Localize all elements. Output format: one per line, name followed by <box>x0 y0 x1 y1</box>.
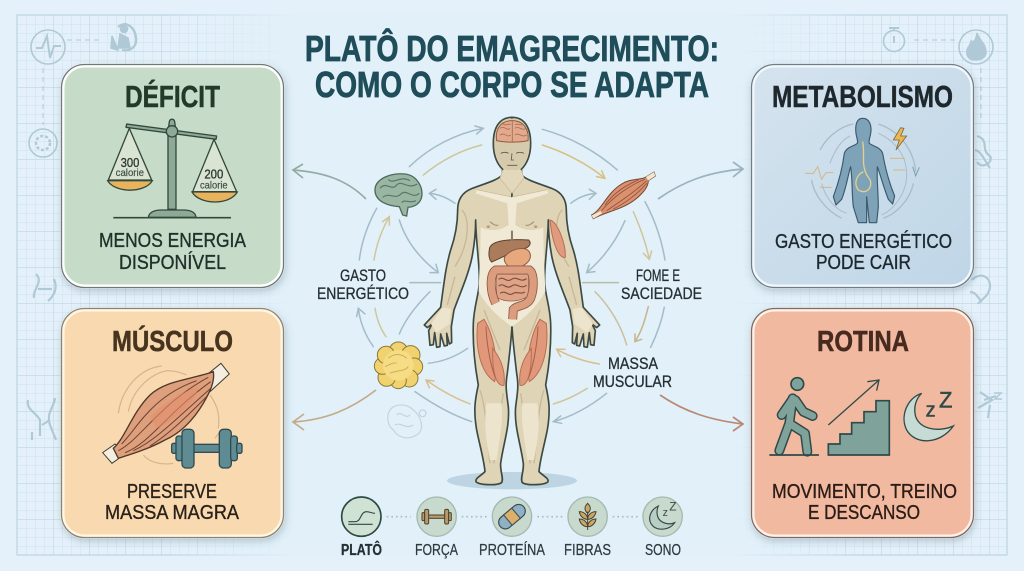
label: fome e saciedade: FOME E <box>636 267 680 285</box>
icon: sleeper sketch <box>978 392 1002 418</box>
heading: DÉFICIT <box>125 79 220 114</box>
liver <box>489 240 530 262</box>
text: movimento, treino e descanso: MOVIMENTO, TREINO <box>772 481 957 503</box>
icon: moon with zzz: Z <box>939 387 952 412</box>
icon: anatomy sketch <box>28 398 56 440</box>
label: fibras: FIBRAS <box>564 542 611 559</box>
icon: brain in head <box>496 121 528 142</box>
arrow: to metabolismo <box>658 162 743 199</box>
icon: walking person <box>770 378 818 455</box>
label: massa muscular <box>593 355 672 391</box>
icon: muscle and dumbbell <box>103 363 242 468</box>
icon: stairs with arrow <box>828 380 889 455</box>
bottom icon row <box>341 497 682 559</box>
label: 300 calorie: 300 <box>121 156 139 170</box>
panel: metabolismo <box>752 64 974 288</box>
panel: músculo <box>62 308 284 538</box>
label: força: FORÇA <box>415 542 458 559</box>
text: menos energia disponível <box>99 230 247 274</box>
organs <box>489 231 533 319</box>
bicep highlight <box>550 220 565 257</box>
label: gasto energético: ENERGÉTICO <box>317 284 409 303</box>
icon: força <box>417 497 456 536</box>
icon: balance scale <box>108 119 237 218</box>
icon: abdomen sketch <box>34 274 56 301</box>
icon: meditation figure <box>111 24 136 50</box>
label: proteína: PROTEÍNA <box>479 540 545 559</box>
icon: muscle <box>592 172 655 219</box>
label: platô: PLATÔ <box>341 540 382 559</box>
face <box>501 152 524 165</box>
icon: intestine sketch <box>975 136 991 168</box>
icon: pulse circle <box>31 30 65 64</box>
title: COMO O CORPO SE ADAPTA <box>315 64 709 105</box>
icon: proteína <box>492 497 532 536</box>
text: preserve massa magra: PRESERVE <box>127 481 217 503</box>
icon: body with energy rings <box>805 118 919 223</box>
panel: déficit <box>62 64 284 288</box>
label: 300 calorie: calorie <box>116 168 144 179</box>
icon: flame circle <box>959 30 993 64</box>
stomach <box>504 248 530 268</box>
small intestine <box>497 273 529 301</box>
icon: walker, stairs, moon <box>770 378 953 455</box>
text: preserve massa magra: MASSA MAGRA <box>105 502 240 524</box>
heading: ROTINA <box>817 326 909 358</box>
arrow: to rotina <box>660 395 743 431</box>
icon: stopwatch <box>884 28 904 52</box>
icon: faint brain <box>388 405 426 438</box>
head shading <box>495 119 529 172</box>
text: movimento, treino e descanso: E DESCANSO <box>808 502 920 524</box>
corner decorative icons <box>28 24 1002 440</box>
icon: platô <box>342 497 381 536</box>
label: fome e saciedade: SACIEDADE <box>621 285 702 303</box>
label: 200 calorie: calorie <box>200 180 228 191</box>
title: PLATÔ DO EMAGRECIMENTO: <box>305 27 719 69</box>
label: massa muscular: MASSA <box>608 355 658 373</box>
heading: MÚSCULO <box>112 324 233 358</box>
connector dots <box>387 514 638 519</box>
text: gasto energético pode cair: GASTO ENERGÉTICO <box>775 230 952 253</box>
arrow: to déficit <box>293 164 366 199</box>
icon: fibras <box>568 497 607 536</box>
label: gasto energético: GASTO <box>340 267 386 285</box>
icon: sono: z <box>663 507 668 519</box>
chest and abdomen light areas <box>476 190 548 327</box>
icon: fat cells <box>374 342 423 389</box>
label: sono: SONO <box>645 542 681 559</box>
large intestine <box>491 270 533 319</box>
text: gasto energético pode cair: PODE CAIR <box>816 252 911 274</box>
text: movimento, treino e descanso <box>772 481 957 524</box>
arrow: to músculo <box>293 390 376 430</box>
icon: gear circle <box>29 129 57 157</box>
heading: METABOLISMO <box>772 79 953 114</box>
icon: stomach sketch <box>970 276 990 304</box>
title <box>305 27 719 105</box>
central diagram <box>293 117 743 489</box>
ground shadow <box>447 472 577 489</box>
label: 200 calorie <box>200 168 228 191</box>
label: 200 calorie: 200 <box>204 168 223 182</box>
label: 300 calorie <box>116 156 144 179</box>
text: gasto energético pode cair <box>775 230 952 274</box>
icon: sono <box>643 497 682 536</box>
arrows network <box>357 126 665 423</box>
icon: moon with zzz: z <box>926 400 936 422</box>
text: menos energia disponível: DISPONÍVEL <box>119 251 226 274</box>
icon: moon with zzz <box>904 387 953 441</box>
text: menos energia disponível: MENOS ENERGIA <box>99 230 247 252</box>
label: fome e saciedade <box>621 267 702 303</box>
icon: green brain <box>375 174 422 216</box>
human figure <box>424 117 600 489</box>
text: preserve massa magra <box>105 481 240 524</box>
label: massa muscular: MUSCULAR <box>593 373 672 391</box>
panel: rotina <box>752 308 974 538</box>
label: gasto energético <box>317 267 409 303</box>
icon: sono: Z <box>669 500 677 514</box>
